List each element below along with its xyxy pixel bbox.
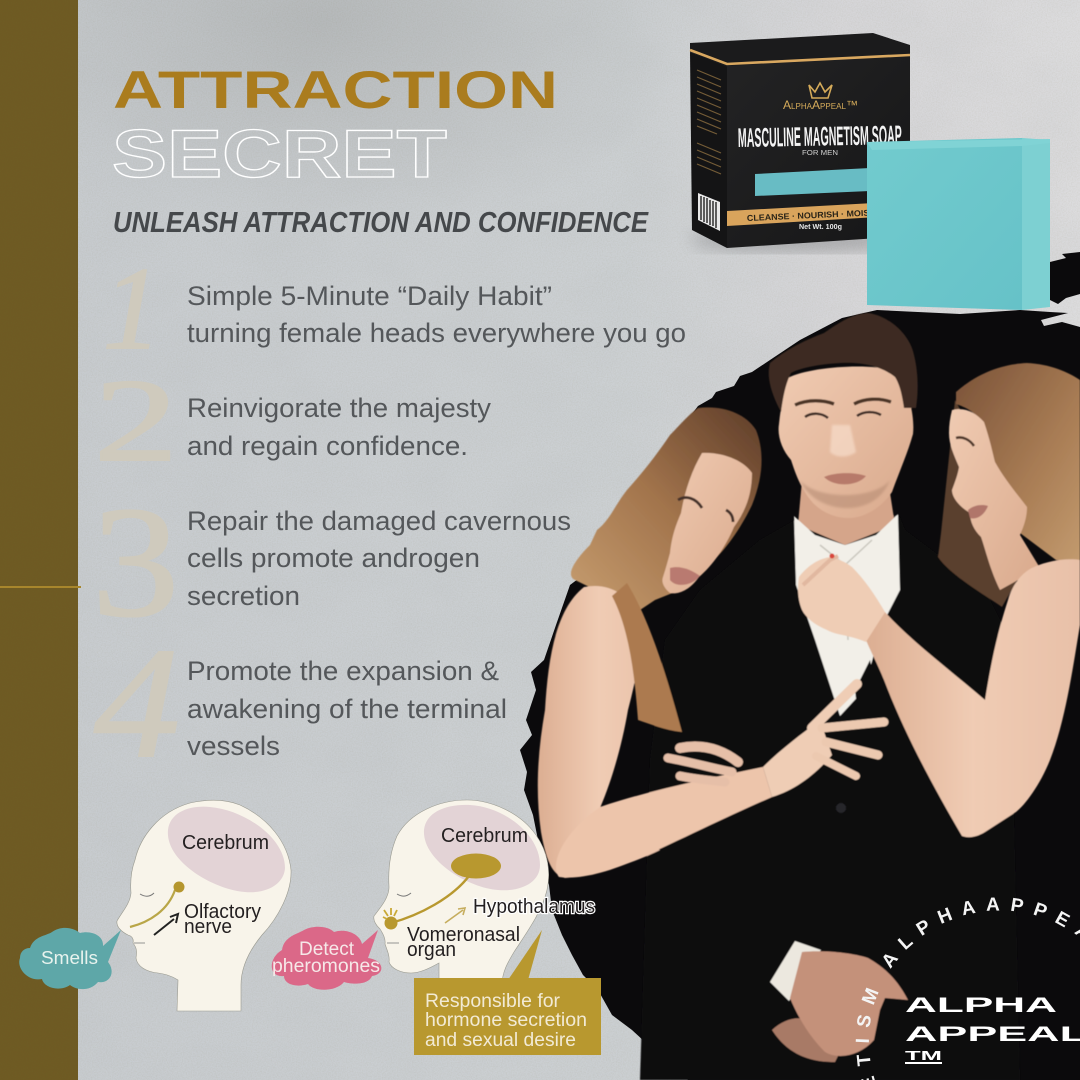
callout: hormone box: Responsible for xyxy=(425,991,561,1012)
man: clasped hands xyxy=(772,1018,842,1062)
man: tie knot xyxy=(855,660,878,716)
crown icon xyxy=(809,83,832,98)
brand logo: APPEAL xyxy=(905,1023,1080,1046)
benefit 1 xyxy=(103,243,686,374)
box left side xyxy=(690,52,727,248)
left woman: eye xyxy=(678,498,733,522)
right woman: eye and lips xyxy=(956,437,974,446)
benefit 3 xyxy=(92,475,571,650)
product: soap box xyxy=(690,33,910,252)
callout: hormone box: hormone secretion xyxy=(425,1010,587,1031)
left woman: lips xyxy=(670,567,700,585)
arrow xyxy=(154,914,178,935)
organ dot xyxy=(384,916,398,930)
benefit 4: 4 xyxy=(94,616,180,791)
cerebrum label: Cerebrum xyxy=(441,825,528,847)
man: mouth xyxy=(824,473,866,484)
orange band xyxy=(727,201,910,226)
band text: CLEANSE · NOURISH · MOIST xyxy=(747,207,876,223)
title: SECRET xyxy=(112,116,447,192)
left woman: back hand xyxy=(668,747,738,782)
callout: hormone box xyxy=(414,930,601,1055)
box front xyxy=(727,56,910,248)
barcode xyxy=(698,193,720,231)
man: suit xyxy=(640,515,1020,1080)
right woman: arm xyxy=(866,559,1080,837)
man: face xyxy=(779,367,913,518)
box brand: AlphaAppeal™ xyxy=(783,98,858,112)
man: shirt xyxy=(794,514,900,716)
benefit 3: secretion xyxy=(187,581,300,611)
brush streak right of soap xyxy=(1050,252,1080,304)
cerebrum label: Cerebrum xyxy=(182,832,269,854)
callout: hormone box: and sexual desire xyxy=(425,1030,576,1051)
box top xyxy=(690,33,910,67)
head diagram: vomeronasal xyxy=(374,800,549,1000)
right woman: face and neck xyxy=(949,409,1040,590)
title: ATTRACTION xyxy=(113,61,558,120)
left gold band xyxy=(0,0,81,1080)
man: jacket button xyxy=(836,803,846,813)
callout: detect pheromones: pheromones xyxy=(272,956,380,977)
black brush stroke backdrop xyxy=(520,310,1080,1080)
benefit 3: Repair the damaged cavernous xyxy=(187,506,571,536)
left woman: front hand xyxy=(763,684,884,797)
left woman: hair back xyxy=(571,407,762,610)
right woman: dark hair behind xyxy=(938,400,1020,607)
side label text lines xyxy=(697,70,721,174)
left woman: face xyxy=(662,453,752,593)
man: shirt collar shadow xyxy=(820,540,872,640)
benefit 1: Simple 5-Minute “Daily Habit” xyxy=(187,281,552,311)
right woman: hand xyxy=(798,554,885,642)
box window xyxy=(755,168,870,196)
nerve dot xyxy=(174,882,184,892)
label: hypothalamus: Hypothalamus xyxy=(473,896,595,918)
mouth xyxy=(134,942,145,944)
man: cuff xyxy=(770,941,821,1001)
man: eyes xyxy=(805,412,881,418)
benefit 2: 2 xyxy=(94,355,178,486)
gold stripe xyxy=(690,50,910,64)
vomeronasal nerve xyxy=(391,876,469,923)
benefit 3: 3 xyxy=(92,475,179,650)
organ label: Vomeronasal xyxy=(407,924,520,946)
left woman: forearm xyxy=(556,767,772,878)
man: nose xyxy=(830,425,856,456)
brand logo xyxy=(856,898,1080,1080)
eye xyxy=(397,893,411,896)
trademark: TM xyxy=(905,1048,942,1063)
benefit 4: vessels xyxy=(187,731,280,761)
callout: smells: Smells xyxy=(41,948,98,968)
right woman: hair xyxy=(956,363,1080,560)
head diagram: olfactory: nerve xyxy=(184,916,232,938)
left woman: hair tail over arm xyxy=(612,583,682,732)
photo: three people xyxy=(538,313,1080,1080)
cerebrum xyxy=(424,805,540,890)
benefit 4: Promote the expansion & xyxy=(187,656,499,686)
trademark xyxy=(905,1048,942,1064)
hypothalamus blob xyxy=(451,854,501,878)
benefit 1: 1 xyxy=(103,243,161,374)
subtitle: UNLEASH ATTRACTION AND CONFIDENCE xyxy=(113,207,649,239)
soap top edge xyxy=(867,139,1050,150)
callout: smells xyxy=(19,928,121,989)
man: hair xyxy=(769,313,918,412)
head diagram: vomeronasal: organ xyxy=(407,939,456,961)
man: brows xyxy=(795,399,891,405)
head outline xyxy=(117,800,291,1011)
rays xyxy=(383,908,397,919)
brand wordmark: ALPHA xyxy=(905,994,1057,1017)
mouth xyxy=(387,942,399,944)
nerve label: Olfactory xyxy=(184,901,261,923)
man: cheek shadow xyxy=(800,480,890,508)
benefit 4 xyxy=(94,616,507,791)
benefit 2: and regain confidence. xyxy=(187,431,468,461)
benefit 3: cells promote androgen xyxy=(187,543,480,573)
arrow xyxy=(445,908,465,923)
soap bar xyxy=(867,138,1050,310)
head outline xyxy=(374,800,549,1000)
callout: detect pheromones xyxy=(272,927,381,990)
benefit 4: awakening of the terminal xyxy=(187,694,507,724)
man: neck xyxy=(798,480,895,545)
benefit 2: Reinvigorate the majesty xyxy=(187,393,492,423)
cerebrum xyxy=(168,807,285,892)
olfactory nerve line xyxy=(130,890,175,927)
title xyxy=(112,61,558,192)
net weight: Net Wt. 100g xyxy=(799,222,842,231)
soap front xyxy=(867,138,1022,310)
head diagram: olfactory xyxy=(117,800,291,1011)
soap side xyxy=(1022,138,1050,310)
benefit 1: turning female heads everywhere you go xyxy=(187,318,686,348)
benefit 2 xyxy=(94,355,492,486)
for men: FOR MEN xyxy=(802,148,838,157)
left woman: shoulder and upper arm xyxy=(538,586,660,878)
eye xyxy=(140,893,154,896)
callout: detect pheromones: Detect xyxy=(299,939,355,960)
